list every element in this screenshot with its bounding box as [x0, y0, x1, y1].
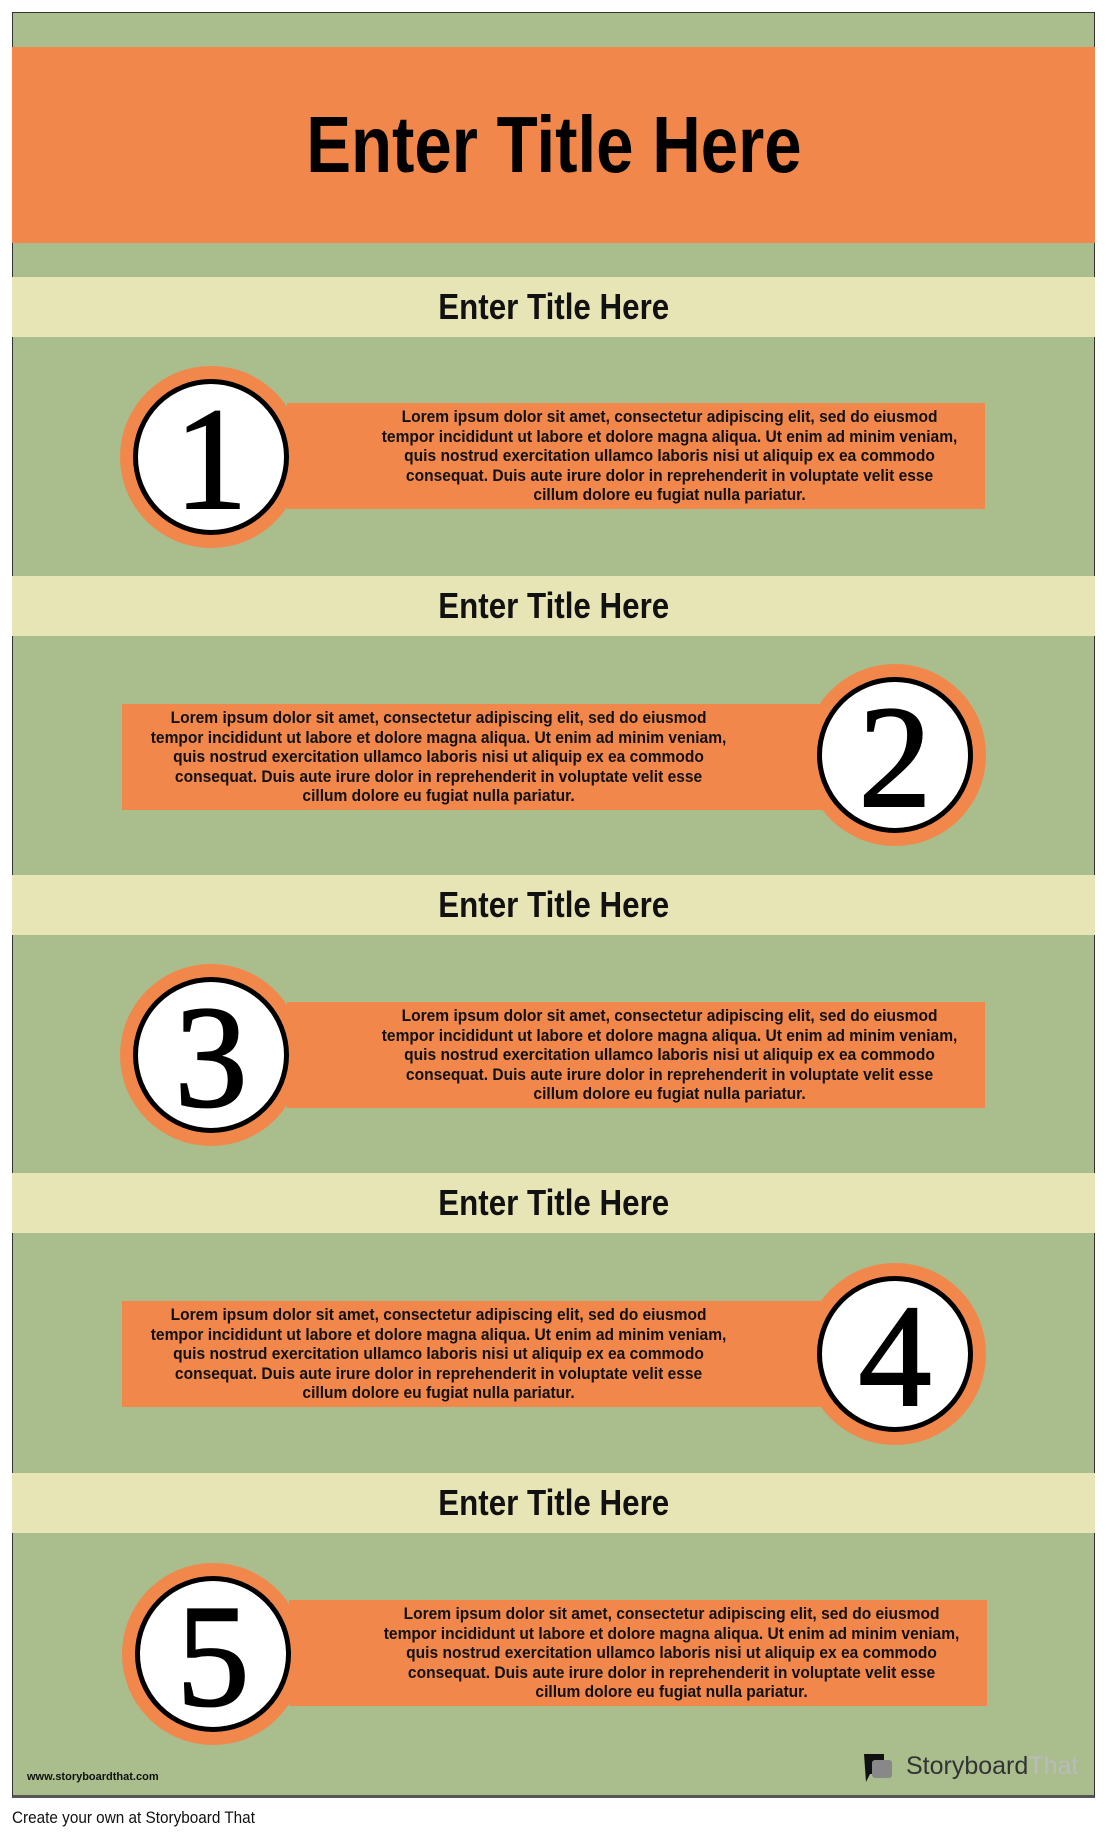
- section 4 text bar: tempor incididunt ut labore et dolore magna aliqua. Ut enim ad minim veniam,: [151, 1325, 726, 1344]
- section 3 text bar: quis nostrud exercitation ullamco laboris nisi ut aliquip ex ea commodo: [405, 1045, 935, 1064]
- section 4 text bar: cillum dolore eu fugiat nulla pariatur.: [302, 1383, 575, 1402]
- section 2 heading: Enter Title Here: [438, 585, 669, 626]
- section 4 heading: Enter Title Here: [438, 1182, 669, 1223]
- section 4 text bar: quis nostrud exercitation ullamco laboris nisi ut aliquip ex ea commodo: [173, 1344, 704, 1363]
- section 4 text bar: Lorem ipsum dolor sit amet, consectetur adipiscing elit, sed do eiusmod: [171, 1305, 706, 1324]
- section 4 text bar: [122, 1301, 825, 1407]
- icon: number 2 circle: 2: [858, 676, 932, 838]
- section 2 text bar: Lorem ipsum dolor sit amet, consectetur adipiscing elit, sed do eiusmod: [171, 708, 706, 727]
- section 1 text bar: tempor incididunt ut labore et dolore magna aliqua. Ut enim ad minim veniam,: [382, 427, 958, 446]
- section 1 text bar: quis nostrud exercitation ullamco laboris nisi ut aliquip ex ea commodo: [405, 446, 935, 465]
- section 5 text bar: quis nostrud exercitation ullamco laboris nisi ut aliquip ex ea commodo: [407, 1643, 937, 1662]
- section 5 text bar: consequat. Duis aute irure dolor in reprehenderit in voluptate velit esse: [408, 1663, 936, 1682]
- section 5 heading: Enter Title Here: [438, 1482, 669, 1523]
- logo: Storyboard That: StoryboardThat: [906, 1752, 1078, 1780]
- footer url: www.storyboardthat.com: [27, 1771, 159, 1783]
- icon: number 3 circle: [120, 964, 302, 1146]
- section 3 heading: [12, 875, 1095, 935]
- icon: number 5 circle: [122, 1563, 304, 1745]
- main title banner: Enter Title Here: [306, 100, 801, 189]
- section 5 text bar: tempor incididunt ut labore et dolore magna aliqua. Ut enim ad minim veniam,: [384, 1624, 960, 1643]
- section 1 text bar: Lorem ipsum dolor sit amet, consectetur adipiscing elit, sed do eiusmod: [402, 407, 938, 426]
- section 2 text bar: tempor incididunt ut labore et dolore magna aliqua. Ut enim ad minim veniam,: [151, 728, 726, 747]
- section 1 text bar: consequat. Duis aute irure dolor in reprehenderit in voluptate velit esse: [406, 466, 934, 485]
- icon: number 4 circle: 4: [858, 1275, 932, 1437]
- section 3 text bar: tempor incididunt ut labore et dolore magna aliqua. Ut enim ad minim veniam,: [382, 1026, 958, 1045]
- section 3 text bar: consequat. Duis aute irure dolor in reprehenderit in voluptate velit esse: [406, 1065, 934, 1084]
- section 5 text bar: Lorem ipsum dolor sit amet, consectetur adipiscing elit, sed do eiusmod: [404, 1604, 940, 1623]
- section 1 heading: [12, 277, 1095, 337]
- icon: number 4 circle: [804, 1263, 986, 1445]
- section 3 heading: Enter Title Here: [438, 884, 669, 925]
- icon: number 1 circle: 1: [174, 378, 248, 540]
- section 5 text bar: [289, 1600, 987, 1706]
- section 3 text bar: Lorem ipsum dolor sit amet, consectetur adipiscing elit, sed do eiusmod: [402, 1006, 938, 1025]
- section 2 text bar: quis nostrud exercitation ullamco laboris nisi ut aliquip ex ea commodo: [173, 747, 704, 766]
- section 5 heading: [12, 1473, 1095, 1533]
- section 2 text bar: cillum dolore eu fugiat nulla pariatur.: [302, 786, 575, 805]
- section 4 text bar: consequat. Duis aute irure dolor in reprehenderit in voluptate velit esse: [175, 1364, 702, 1383]
- icon: number 5 circle: 5: [176, 1575, 250, 1737]
- section 3 text bar: [287, 1002, 985, 1108]
- section 5 text bar: cillum dolore eu fugiat nulla pariatur.: [536, 1682, 808, 1701]
- section 2 heading: [12, 576, 1095, 636]
- icon: number 2 circle: [804, 664, 986, 846]
- section 2 text bar: consequat. Duis aute irure dolor in reprehenderit in voluptate velit esse: [175, 767, 702, 786]
- section 1 text bar: cillum dolore eu fugiat nulla pariatur.: [534, 485, 806, 504]
- bottom caption: Create your own at Storyboard That: [12, 1808, 255, 1827]
- section 2 text bar: [122, 704, 825, 810]
- section 4 heading: [12, 1173, 1095, 1233]
- icon: number 1 circle: [120, 366, 302, 548]
- icon: number 3 circle: 3: [174, 976, 248, 1138]
- section 1 text bar: [287, 403, 985, 509]
- section 1 heading: Enter Title Here: [438, 286, 669, 327]
- main title banner: [12, 47, 1095, 243]
- section 3 text bar: cillum dolore eu fugiat nulla pariatur.: [534, 1084, 806, 1103]
